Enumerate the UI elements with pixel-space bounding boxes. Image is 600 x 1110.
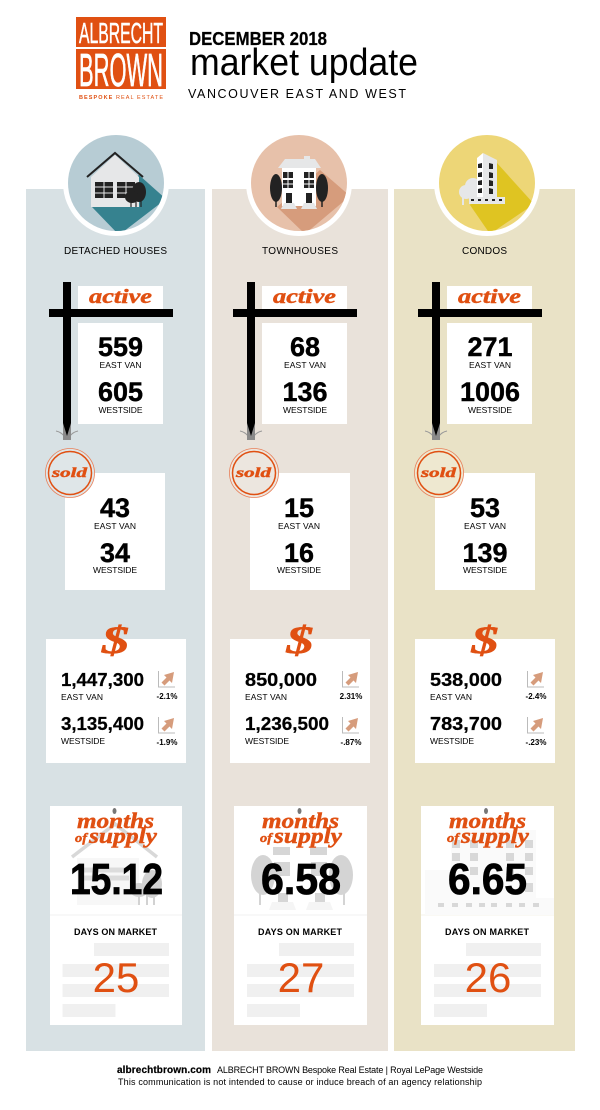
footer: albrechtbrown.com [117,1065,211,1076]
sold section: EAST VAN [464,521,506,531]
price section [415,619,555,763]
active section: WESTSIDE [468,405,512,415]
price section [46,619,186,763]
price section: $ [285,619,314,662]
logo: ALBRECHT [79,18,163,50]
price section: EAST VAN [245,692,287,702]
months of supply section: DAYS ON MARKET [74,927,158,937]
price section: 3,135,400 [61,713,144,734]
sold section: EAST VAN [94,521,136,531]
logo [76,17,166,101]
sold section: sold [420,466,457,481]
months of supply section: of [447,830,461,845]
title: DECEMBER 2018 [189,28,327,49]
active section: EAST VAN [284,360,326,370]
heading: townhouses: TOWNHOUSES [262,246,338,257]
months of supply section: 27 [278,954,324,1001]
sold section [414,448,535,590]
sold section: 53 [470,493,500,523]
sold section: 34 [100,538,130,568]
sold section: 43 [100,493,130,523]
price section: 1,447,300 [61,669,144,690]
sold section [230,448,350,590]
price section: EAST VAN [61,692,103,702]
price section: 850,000 [245,669,317,690]
sold section: WESTSIDE [93,565,137,575]
title: market update [190,42,418,84]
active section: 605 [98,377,143,407]
active section: WESTSIDE [283,405,327,415]
sold section: EAST VAN [278,521,320,531]
icon: townhouse [246,130,352,236]
icon: detached house [63,130,169,236]
active section: 271 [467,332,513,362]
active section: active [273,286,336,308]
months of supply section [421,806,554,1025]
active section: WESTSIDE [98,405,143,415]
months of supply section: 15.12 [70,855,163,904]
heading: condos: CONDOS [462,246,507,257]
title: VANCOUVER EAST AND WEST [188,87,406,101]
months of supply section: of [75,830,89,845]
months of supply section: 6.58 [261,855,341,904]
price section: -2.1% [157,692,177,701]
sold section [46,448,165,590]
price section [230,619,370,763]
months of supply section: DAYS ON MARKET [258,927,342,937]
price section: $ [470,619,499,662]
price section: 783,700 [430,713,502,734]
price section: WESTSIDE [245,736,289,746]
months of supply section: supply [88,823,157,848]
price section: EAST VAN [430,692,472,702]
price section: WESTSIDE [61,736,105,746]
active section: active [458,286,521,308]
active section: 559 [98,332,143,362]
footer: ALBRECHT BROWN Bespoke Real Estate | Royal LePage Westside [217,1065,483,1075]
active section [418,282,542,440]
active section: 1006 [460,377,520,407]
footer [117,1065,483,1087]
price section: WESTSIDE [430,736,474,746]
price section: 538,000 [430,669,502,690]
months of supply section: supply [460,823,529,848]
months of supply section [234,806,367,1025]
sold section: sold [51,466,88,481]
panel: townhouses [212,130,388,1051]
text: BROWN [79,44,163,96]
months of supply section: 25 [93,954,139,1001]
sold section: 15 [284,493,314,523]
price section: -.23% [526,738,546,747]
months of supply section: months [449,808,526,833]
panel: condos [394,130,575,1051]
panel: detached houses [26,130,205,1051]
price section: -1.9% [157,738,177,747]
price section: 1,236,500 [245,713,329,734]
active section: active [89,286,152,308]
sold section: sold [235,466,272,481]
sold section: 139 [462,538,508,568]
logo: BESPOKE REAL ESTATE [79,95,163,101]
active section [49,282,173,440]
months of supply section: months [262,808,339,833]
months of supply section: supply [273,823,342,848]
months of supply section: months [77,808,154,833]
price section: -.87% [341,738,361,747]
active section: EAST VAN [469,360,511,370]
footer: This communication is not intended to cause or induce breach of an agency relationship [118,1077,482,1087]
title [188,28,418,101]
active section: 136 [282,377,328,407]
price section: 2.31% [340,692,362,701]
months of supply section: 6.65 [448,855,527,904]
sold section: WESTSIDE [463,565,507,575]
sold section: WESTSIDE [277,565,321,575]
active section: 68 [290,332,320,362]
heading: detached houses: DETACHED HOUSES [64,246,167,257]
months of supply section: 26 [465,954,511,1001]
active section [233,282,357,440]
months of supply section: DAYS ON MARKET [445,927,530,937]
price section: -2.4% [526,692,546,701]
active section: EAST VAN [100,360,142,370]
months of supply section [50,806,182,1025]
months of supply section: of [260,830,274,845]
icon: condo tower [434,130,540,236]
sold section: 16 [284,538,314,568]
price section: $ [101,619,129,662]
